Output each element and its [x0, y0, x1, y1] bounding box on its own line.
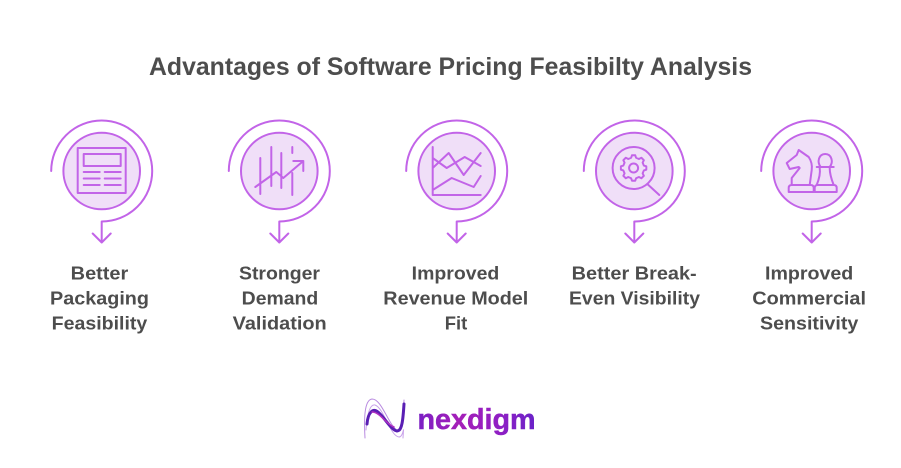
label: [50, 262, 149, 334]
label: Revenue Model: [383, 288, 528, 308]
logo: nexdigm: [365, 399, 536, 438]
panel: Better Break-Even Visibility: [569, 120, 701, 308]
icon: rising chart in circle with spiral arrow: [229, 120, 330, 242]
label: Improved: [412, 262, 499, 284]
label: Validation: [233, 312, 327, 334]
panel: Stronger Demand Validation: [229, 120, 330, 334]
label: Stronger: [239, 262, 320, 284]
panel: Improved Commercial Sensitivity: [752, 120, 866, 334]
label: [569, 262, 701, 308]
label: Fit: [445, 312, 467, 334]
label: Packaging: [50, 288, 149, 308]
icon: chess pieces in circle with spiral arrow: [761, 120, 862, 242]
label: Commercial: [752, 288, 866, 308]
label: [752, 262, 866, 334]
icon: line chart in circle with spiral arrow: [406, 120, 507, 242]
label: Demand: [242, 288, 318, 308]
label: [383, 262, 528, 334]
label: Sensitivity: [760, 312, 859, 334]
title: Advantages of Software Pricing Feasibilty Analysis: [149, 53, 752, 81]
panel: Improved Revenue Model Fit: [383, 120, 528, 334]
icon: wave mark: [365, 399, 404, 438]
wordmark: nexdigm: [418, 404, 536, 436]
icon: newspaper in circle with spiral arrow: [51, 120, 152, 242]
label: [233, 262, 327, 334]
icon: magnifier with gear in circle with spiral arrow: [584, 120, 685, 242]
panel: Better Packaging Feasibility: [50, 120, 152, 334]
label: Improved: [765, 262, 853, 284]
label: Feasibility: [52, 312, 148, 334]
label: Better Break-: [572, 262, 697, 284]
label: Better: [71, 262, 128, 284]
label: Even Visibility: [569, 288, 701, 308]
